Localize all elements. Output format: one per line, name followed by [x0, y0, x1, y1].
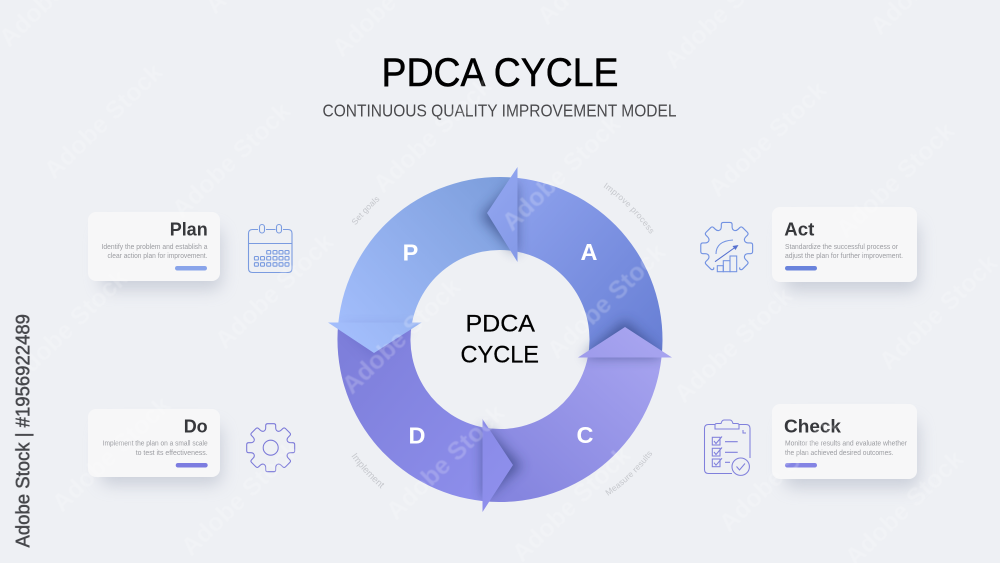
curved step labels: Implement [352, 453, 384, 488]
segment letters: P [403, 240, 418, 266]
panel: do: Do [184, 417, 208, 437]
panel: do [88, 409, 222, 485]
watermark pattern: Adobe Stock [714, 411, 843, 537]
panel: check [772, 404, 919, 488]
watermark pattern: Adobe Stock [874, 249, 1000, 375]
watermark pattern: Adobe Stock [176, 435, 305, 561]
panel: check: Monitor the results and evaluate whether [785, 441, 908, 448]
watermark pattern: Adobe Stock [39, 58, 168, 184]
curved step labels: Improve process [604, 182, 654, 234]
center label: PDCA [466, 310, 536, 338]
cycle diagram [328, 167, 672, 512]
curved step labels: Measure results [605, 452, 652, 496]
panel: check: the plan achieved desired outcomes. [785, 450, 894, 457]
icon: calendar [248, 224, 292, 272]
icon: gear [247, 424, 295, 472]
segment letters [403, 239, 598, 448]
vertical stock id: Adobe Stock | #1956922489 [12, 314, 34, 548]
segment letters: A [581, 239, 598, 265]
watermark pattern: Adobe Stock [368, 72, 497, 198]
panel: plan: clear action plan for improvement. [108, 253, 208, 260]
watermark pattern: Adobe Stock [831, 117, 960, 243]
icon: clipboard checklist [704, 420, 750, 475]
watermark pattern: Adobe Stock [47, 391, 176, 517]
segment letters: C [577, 422, 594, 448]
title: PDCA CYCLE [382, 51, 618, 95]
watermark pattern: Adobe Stock [497, 110, 626, 236]
watermark pattern: Adobe Stock [337, 273, 466, 399]
panel: act: Act [784, 220, 814, 240]
watermark pattern: Adobe Stock [210, 228, 339, 354]
center label [460, 310, 539, 368]
arrowhead shadows [340, 180, 664, 500]
watermark pattern: Adobe Stock [381, 399, 510, 525]
watermark pattern: Adobe Stock [669, 282, 798, 408]
panel: do: Implement the plan on a small scale [103, 441, 208, 448]
panel: check: Check [784, 416, 842, 436]
center label: CYCLE [460, 342, 539, 368]
arrowheads [328, 167, 672, 512]
panel: plan: Identify the problem and establish a [102, 244, 208, 251]
icon: gear with growth chart [701, 222, 753, 272]
curved step labels [352, 182, 654, 496]
curved step labels: Set goals [352, 197, 380, 224]
panel: act: Standardize the successful process or [785, 244, 899, 251]
segment letters: D [409, 422, 425, 448]
panel: do: to test its effectiveness. [136, 450, 208, 457]
panel: act: adjust the plan for further improvement. [785, 253, 903, 260]
watermark pattern: Adobe Stock [4, 264, 133, 390]
panel: plan: Plan [170, 220, 208, 240]
panel: act [772, 207, 919, 291]
watermark pattern: Adobe Stock [167, 97, 296, 223]
subtitle: CONTINUOUS QUALITY IMPROVEMENT MODEL [322, 100, 677, 120]
panel: plan [88, 212, 222, 290]
watermark pattern: Adobe Stock [542, 238, 671, 364]
watermark pattern: Adobe Stock [703, 76, 832, 202]
ring segments [337, 177, 662, 502]
